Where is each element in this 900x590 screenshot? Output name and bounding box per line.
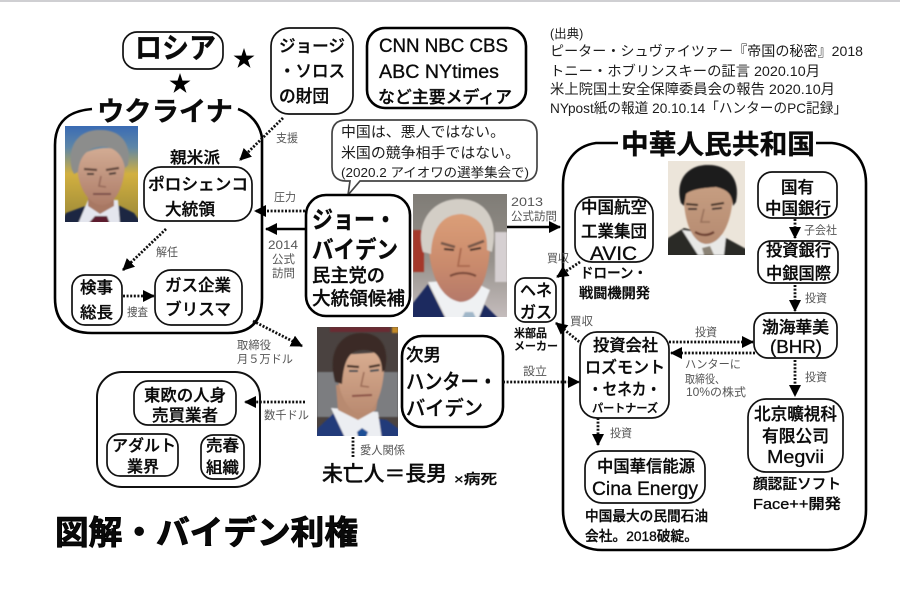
arrow: Rosemont acquisition [556,315,593,344]
text: largest private oil company: 会社。2018破綻。 [585,528,698,544]
speech bubble: Biden quote [332,120,537,195]
box: Hunter Biden [402,336,503,427]
box: Hunter Biden: バイデン [406,396,483,420]
arrow: 2013 official visit: 公式訪問 [511,210,557,223]
box: Hunter Biden: ハンター・ [406,371,497,394]
arrow: investigation [123,296,154,319]
text: widow of eldest son: 未亡人＝長男 [322,463,447,486]
box: BHR: 渤海華美 [762,318,830,337]
title: 図解・バイデン利権 [55,514,358,551]
text block: sources: 米上院国土安全保障委員会の報告 2020.10月 [550,81,835,97]
arrow: subsidiary [795,219,837,238]
box: BOC International: 中銀国際 [766,264,831,283]
box: Rosemont Seneca Partners: 投資会社 [593,336,658,355]
arrow: thousands of dollars: 数千ドル [264,409,309,422]
photo: Joe Biden [411,194,507,320]
box: gas company Burisma: ブリスマ [165,299,231,319]
arrow: Burisma board fee to Hunter: 取締役 [237,338,271,352]
heading: People's Republic of China: 中華人民共和国 [621,130,815,160]
arrow: Soros support [240,118,298,160]
box: Megvii: 有限公司 [762,427,829,446]
arrow: Soros support: 支援 [276,131,298,145]
box: Joe Biden: ジョー・ [312,207,396,234]
box: adult industry [107,434,178,476]
box: prostitution rings [201,435,244,479]
box: state-owned Bank of China [758,172,837,218]
panel: Ukraine [55,97,262,333]
arrow: investment to BHR [795,285,827,311]
box: prostitution rings: 組織 [206,459,239,477]
box: state-owned Bank of China: 中国銀行 [765,199,831,218]
icon: star near Russia [234,48,254,68]
arrow: 2014 official visit: 2014 [268,240,299,252]
arrow: 2014 official visit [266,229,306,280]
box: prosecutor general: 検事 [80,279,113,297]
panel: China [563,130,866,550]
box: prosecutor general: 総長 [80,304,113,322]
arrow: thousands of dollars [245,402,309,422]
connector: affair [353,437,405,458]
arrow: Rosemont acquisition: 買収 [570,315,593,328]
box: President Poroshenko: 大統領 [165,200,216,219]
text: US parts maker: メーカー [514,340,558,353]
text: US parts maker [514,326,558,353]
text: widow of eldest son: ×病死 [454,471,497,487]
box: Megvii [748,399,843,472]
box: prostitution rings: 売春 [206,437,239,455]
arrow: investment to China Energy [598,418,632,445]
box: BHR: (BHR) [770,337,822,357]
text: widow of eldest son [322,463,497,487]
box: prosecutor general [72,275,122,325]
arrow: BHR gives Hunter board seat: 10%の株式 [686,385,747,399]
arrow: investment to BHR: 投資 [805,291,827,305]
box: Joe Biden [306,195,410,316]
photo: Hunter Biden [315,327,400,440]
box: BHR [754,313,837,358]
box: BOC International [758,241,838,283]
text: largest private oil company: 中国最大の民間石油 [585,508,708,524]
box: Hene Gas: ガス [520,303,552,322]
box: Joe Biden: 大統領候補 [312,288,405,309]
label: pro-US faction: 親米派 [170,149,220,167]
arrow: dismissal: 解任 [156,245,178,259]
arrow: Burisma board fee to Hunter [237,321,302,366]
arrow: pressure [255,191,305,211]
panel: Eastern Europe trafficking [97,372,260,487]
arrow: Burisma board fee to Hunter: 月５万ドル [237,354,293,366]
box: Soros foundation: ジョージ [279,37,345,56]
box: BOC International: 投資銀行 [766,241,831,260]
box: Megvii: 北京曠視科 [754,405,837,424]
text: drone and fighter development: 戦闘機開発 [579,285,650,301]
arrow: investigation: 捜査 [127,305,148,319]
text block: sources: (出典) [550,27,583,41]
text block: sources: NYpost紙の報道 20.10.14「ハンターのPC記録」 [550,100,847,116]
box: Joe Biden: 民主党の [312,265,385,286]
arrow: 2014 official visit: 公式 [272,253,295,266]
arrow: BHR gives Hunter board seat: ハンターに [685,358,741,371]
text block: sources: トニー・ホブリンスキーの証言 2020.10月 [550,63,820,79]
text: drone and fighter development: ドローン・ [580,265,647,281]
connector: affair: 愛人関係 [360,444,405,457]
photo: Xi Jinping [668,161,745,255]
heading: Ukraine: ウクライナ [97,97,233,127]
arrow: 2013 official visit [507,197,560,227]
icon: star above Ukraine [170,73,190,93]
arrow: BHR gives Hunter board seat: 取締役、 [685,372,725,386]
arrow: pressure: 圧力 [274,191,296,204]
box: AVIC [575,197,653,265]
box: Soros foundation [271,28,353,114]
arrow: subsidiary: 子会社 [804,223,837,237]
text: largest private oil company [585,508,708,544]
arrow: 2013 official visit: 2013 [511,197,543,209]
arrow: founding Rosemont Seneca: 設立 [523,364,547,378]
box: China Energy: Cina Energy [592,479,698,500]
text: drone and fighter development [579,265,650,301]
text: face recognition software [753,476,842,513]
box: human traffickers: 売買業者 [152,406,218,425]
box: Soros foundation: の財団 [279,87,329,106]
box: state-owned Bank of China: 国有 [781,178,814,197]
arrow: BHR gives Hunter board seat [671,353,755,399]
box: Megvii: Megvii [767,447,824,467]
box: China Energy: 中国華信能源 [597,457,695,476]
box: adult industry: 業界 [127,458,159,476]
arrow: Rosemont invests in BHR: 投資 [695,325,717,339]
box: Rosemont Seneca Partners: ロズモント [585,357,665,377]
box: major media: CNN NBC CBS [379,36,508,57]
box: major media: など主要メディア [378,87,512,107]
arrow: dismissal [123,229,178,270]
box: Rosemont Seneca Partners: ・セネカ・ [588,380,661,399]
box: AVIC: 工業集団 [581,222,647,241]
text block: sources [550,27,863,116]
arrow: Rosemont invests in BHR [669,325,753,342]
box: Rosemont Seneca Partners: パートナーズ [592,401,658,415]
box: human traffickers: 東欧の人身 [144,386,226,405]
text: face recognition software: Face++開発 [753,496,842,513]
text: face recognition software: 顔認証ソフト [753,476,841,493]
box: Hene Gas: ヘネ [520,281,552,300]
arrow: founding Rosemont Seneca [503,364,579,382]
box: President Poroshenko: ポロシェンコ [148,175,248,194]
speech bubble: Biden quote: 中国は、悪人ではない。 [341,124,505,141]
box: AVIC: AVIC [590,244,637,265]
speech bubble: Biden quote: 米国の競争相手ではない。 [341,144,520,162]
arrow: AVIC acquisition: 買収 [547,252,569,265]
box: President Poroshenko [144,167,252,221]
photo: Poroshenko [65,126,138,222]
box: gas company Burisma: ガス企業 [165,276,231,295]
box: Rosemont Seneca Partners [580,332,669,418]
arrow: 2014 official visit: 訪問 [272,267,295,280]
arrow: AVIC acquisition [547,252,580,277]
arrow: investment to China Energy: 投資 [610,426,632,440]
box: Russia: ロシア [135,33,216,65]
box: Joe Biden: バイデン [312,236,398,264]
speech bubble: Biden quote: (2020.2 アイオワの選挙集会で) [341,165,529,180]
box: Hene Gas [515,278,556,322]
box: gas company Burisma [155,270,242,325]
arrow: investment to Megvii [795,360,827,396]
arrow: investment to Megvii: 投資 [805,370,827,384]
box: China Energy [585,451,705,503]
text block: sources: ピーター・シュヴァイツァー『帝国の秘密』2018 [550,43,863,59]
box: human traffickers [134,381,236,425]
text: US parts maker: 米部品 [514,326,547,340]
box: adult industry: アダルト [112,436,176,455]
box: major media: ABC NYtimes [379,62,499,83]
box: Soros foundation: ・ソロス [279,62,345,81]
box: major media [367,28,526,108]
box: Hunter Biden: 次男 [406,345,441,365]
box: AVIC: 中国航空 [581,198,647,217]
